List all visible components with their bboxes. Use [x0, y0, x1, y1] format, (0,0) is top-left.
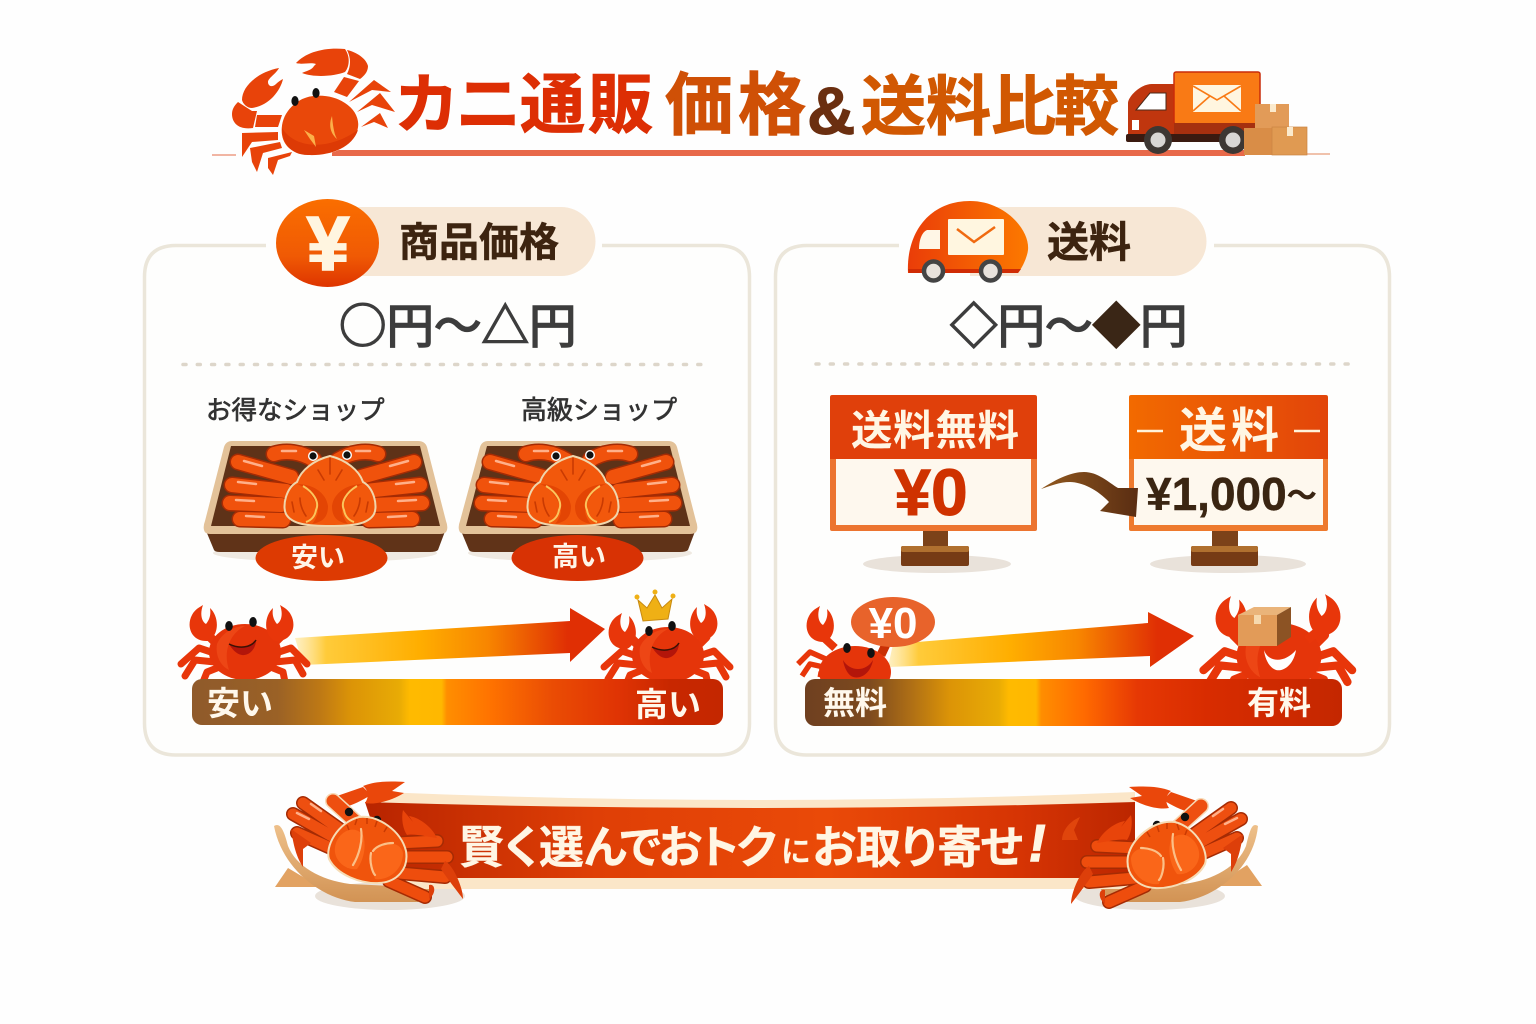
slogan — [459, 811, 1051, 876]
icon: crown — [634, 590, 676, 621]
title underline — [212, 153, 1330, 155]
crab: crowned premium — [604, 590, 730, 685]
crab: happy cheap — [181, 605, 307, 682]
sign: paid shipping: ¥1,000 — [1146, 468, 1287, 520]
title text: & — [807, 74, 855, 149]
crab: paid shipping carrying parcel — [1203, 594, 1352, 691]
sign: free shipping — [830, 395, 1037, 573]
arrow: free to paid — [1041, 472, 1138, 517]
heading: shipping — [908, 201, 1206, 280]
price range: ○円〜△円 — [339, 288, 576, 357]
badge: expensive — [512, 535, 644, 581]
price scale bar — [192, 677, 723, 726]
shipping scale bar: 有料 — [1247, 678, 1311, 724]
icon: delivery truck with parcels — [1126, 72, 1307, 155]
panel: product price — [144, 199, 750, 755]
heading: product price — [276, 199, 596, 287]
icon: parcel — [1238, 607, 1291, 646]
crab: banner left — [291, 781, 463, 899]
title block — [212, 49, 1330, 175]
slogan: ! — [1024, 815, 1051, 873]
sign: paid shipping: 送料 — [1179, 391, 1279, 461]
ribbon — [365, 792, 1135, 889]
badge: cheap: 安い — [291, 536, 345, 575]
price scale bar: 高い — [635, 678, 701, 726]
bottom banner — [274, 781, 1262, 910]
title text: カニ通販 — [394, 52, 653, 146]
slogan: に — [781, 827, 811, 871]
badge: cheap — [256, 535, 388, 581]
panel frame — [144, 246, 750, 755]
slogan: お取り寄せ — [812, 811, 1025, 876]
badge: expensive: 高い — [552, 535, 606, 574]
panel frame — [776, 246, 1390, 755]
panel: shipping — [776, 201, 1390, 755]
tray: premium crab — [459, 441, 697, 581]
slogan: 賢く選んでおトク — [459, 811, 780, 876]
title text — [394, 50, 1119, 149]
arrow: shipping rises — [888, 612, 1194, 667]
crab: banner right — [1071, 786, 1243, 904]
tray: value crab — [204, 441, 447, 581]
sign: free shipping: 送料無料 — [851, 397, 1019, 457]
crab: free shipping holding bubble — [798, 597, 935, 698]
shipping scale bar: 無料 — [823, 678, 887, 724]
heading: shipping: 送料 — [1047, 209, 1131, 270]
price scale bar: 安い — [207, 677, 273, 725]
heading: product price: ¥ — [307, 202, 349, 287]
label: premium shop: 高級ショップ — [521, 390, 677, 427]
shipping scale bar — [805, 678, 1342, 726]
icon: shipping truck — [908, 201, 1028, 280]
bubble: zero yen: ¥0 — [869, 599, 917, 648]
icon: small claw on right crab — [1062, 817, 1080, 840]
sign: free shipping: ¥0 — [894, 455, 968, 529]
icon: title crab — [232, 49, 395, 175]
arrow: price rises — [295, 608, 605, 665]
shipping range: ◇円〜◆円 — [950, 288, 1188, 357]
banner shadows and wood — [274, 825, 1262, 910]
heading: product price: 商品価格 — [399, 210, 559, 268]
title text: 価格 — [665, 50, 806, 149]
label: value shop: お得なショップ — [206, 390, 385, 427]
sign: paid shipping: 〜 — [1287, 471, 1317, 515]
sign: paid shipping — [1129, 391, 1328, 573]
title text: 送料比較 — [861, 54, 1119, 148]
